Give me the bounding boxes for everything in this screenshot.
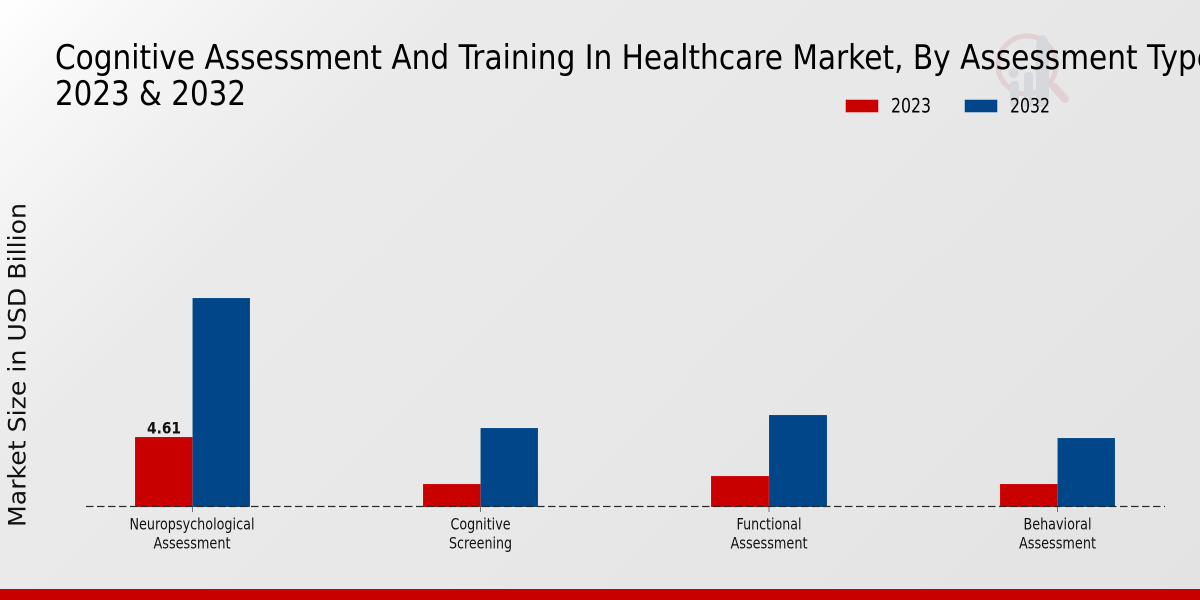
y axis label: Market Size in USD Billion	[4, 203, 32, 527]
category label: Functional Assessment: Assessment	[730, 534, 808, 552]
title: 2023 & 2032	[55, 74, 246, 113]
x axis ticks	[192, 507, 1058, 512]
bars: Functional Assessment	[711, 415, 827, 507]
title	[55, 38, 1200, 113]
category label: Cognitive Screening: Screening	[449, 534, 512, 552]
bar chart	[86, 298, 1165, 552]
legend item: 2023: 2023	[891, 94, 931, 118]
legend item: 2032: 2032	[1010, 94, 1050, 118]
bars: Neuropsychological Assessment	[135, 298, 250, 507]
legend item: 2023	[846, 94, 931, 118]
category label: Neuropsychological Assessment: Assessment	[154, 534, 230, 552]
bars: Behavioral Assessment	[1000, 438, 1115, 507]
category label: Behavioral Assessment: Behavioral	[1024, 514, 1092, 534]
x axis baseline	[86, 506, 1165, 508]
category label: Neuropsychological Assessment: Neuropsychological	[130, 514, 254, 534]
footer bar	[0, 589, 1200, 600]
category label: Cognitive Screening	[449, 514, 512, 552]
category label: Behavioral Assessment	[1019, 514, 1096, 552]
bars: Cognitive Screening	[423, 428, 538, 507]
x axis baseline highlight	[86, 507, 1164, 509]
category label: Functional Assessment	[730, 514, 808, 552]
category label: Functional Assessment: Functional	[736, 514, 802, 534]
data label: 4.61	[147, 418, 181, 437]
icon: watermark magnifier with bars	[998, 35, 1065, 107]
legend item: 2032	[964, 94, 1050, 118]
category label: Neuropsychological Assessment	[130, 514, 254, 552]
legend	[846, 94, 1050, 118]
category label: Cognitive Screening: Cognitive	[450, 514, 510, 534]
category label: Behavioral Assessment: Assessment	[1019, 534, 1096, 552]
